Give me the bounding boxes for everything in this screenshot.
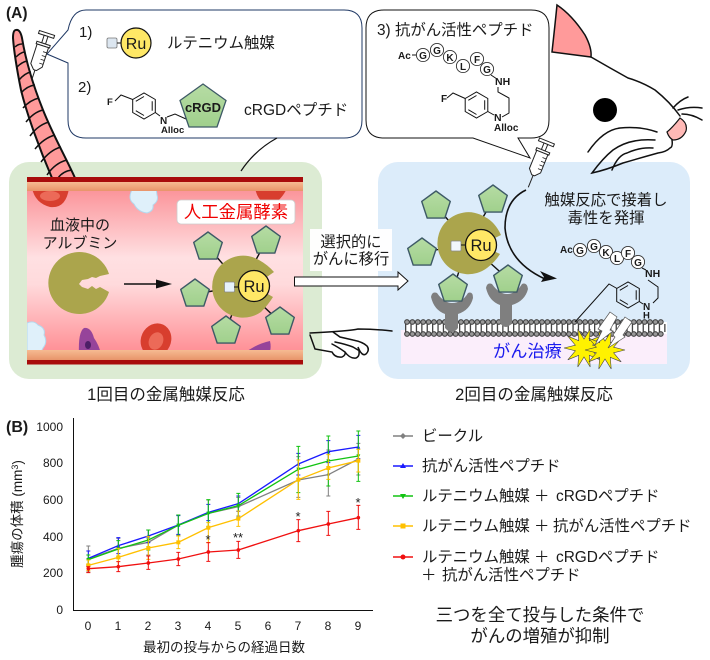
structure: peptide prodrug: Alloc — [494, 123, 519, 134]
icon: artificial metalloenzyme — [181, 226, 294, 343]
structure: attached peptide: K — [602, 248, 610, 259]
series: Ru + anticancer peptide — [86, 449, 360, 571]
legend: Ru + peptide: ルテニウム触媒 — [422, 517, 530, 535]
structure: cRGD conjugate: N — [160, 116, 167, 127]
legend: vehicle — [393, 427, 483, 445]
structure: attached peptide: G — [590, 242, 598, 253]
structure: peptide prodrug: L — [460, 62, 466, 73]
series: anticancer peptide — [86, 435, 360, 566]
x axis ticks: 4 — [205, 619, 212, 633]
label: cancer therapy: がん治療 — [493, 341, 562, 361]
data series — [86, 431, 360, 573]
arrow: albumin to enzyme — [124, 280, 172, 288]
legend: all three: ＋ — [421, 567, 436, 584]
icon: syringe 1 — [24, 31, 55, 83]
callout: catalysts 1 and 2 — [47, 10, 362, 138]
mouse ear — [552, 5, 591, 57]
y axis ticks — [36, 420, 63, 617]
legend: Ru + cRGD — [393, 487, 659, 505]
y axis ticks: 600 — [43, 493, 63, 507]
icon: enzyme bound to receptors: Ru — [470, 237, 492, 255]
structure: attached peptide: F — [625, 249, 631, 260]
structure: attached peptide: L — [614, 254, 620, 265]
legend: Ru + cRGD: cRGDペプチド — [556, 487, 659, 505]
legend: all three: ＋ — [534, 549, 549, 566]
legend: Ru + cRGD: ルテニウム触媒 — [422, 487, 530, 505]
significance marks: * — [205, 532, 211, 547]
structure: attached peptide: G — [634, 258, 642, 269]
item number 2: 2) — [78, 79, 91, 96]
cell membrane — [405, 322, 667, 334]
icon: Ru catalyst — [107, 28, 151, 58]
legend — [393, 427, 692, 584]
blood cells and white cells — [27, 188, 287, 362]
text: catalytic attachment: 毒性を発揮 — [568, 209, 644, 227]
legend: Ru + cRGD: ＋ — [534, 488, 549, 505]
y axis ticks: 0 — [56, 603, 63, 617]
icon: mouse — [552, 5, 702, 173]
mouse nose — [667, 118, 686, 140]
label: artificial metalloenzyme: 人工金属酵素 — [184, 202, 288, 222]
y axis ticks: 200 — [43, 566, 63, 580]
icon: enzyme bound to receptors — [408, 185, 522, 301]
series: vehicle — [86, 443, 360, 572]
structure: peptide prodrug: NH — [495, 76, 510, 88]
x axis ticks: 2 — [145, 619, 152, 633]
text: selective migration to cancer: がんに移行 — [313, 251, 389, 268]
mouse whiskers — [588, 97, 702, 170]
text: catalytic attachment: 触媒反応で接着し — [544, 191, 668, 209]
callout: peptide 3 — [366, 10, 549, 158]
x axis ticks — [85, 619, 362, 633]
structure: attached peptide: N — [643, 302, 650, 313]
connector line: callout to vessel — [241, 138, 277, 171]
text: selective migration to cancer: 選択的に — [320, 234, 382, 251]
structure: attached peptide: H — [643, 310, 650, 322]
label: anticancer peptide: 3) 抗がん活性ペプチド — [377, 21, 533, 39]
x axis ticks: 3 — [175, 619, 182, 633]
icon: mouse tail — [13, 30, 75, 178]
legend: vehicle: ビークル — [422, 427, 483, 445]
icon: receptor right — [486, 284, 528, 327]
legend: Ru + peptide — [393, 517, 692, 535]
structure: peptide prodrug: G — [419, 51, 427, 62]
item number 1: 1) — [79, 24, 92, 41]
y axis ticks: 800 — [43, 456, 63, 470]
structure: attached peptide: NH — [645, 268, 660, 280]
y axis title: 腫瘍の体積 (mm — [10, 470, 25, 568]
label: albumin in blood: 血液中の — [50, 217, 110, 234]
x axis ticks: 6 — [265, 619, 272, 633]
vessel top wall — [27, 182, 303, 191]
structure: peptide prodrug: G — [483, 65, 491, 76]
icon: receptor left — [431, 292, 473, 332]
icon: Ru catalyst: Ru — [126, 36, 146, 53]
label: cRGD peptide: cRGDペプチド — [244, 101, 348, 119]
legend: anticancer peptide: 抗がん活性ペプチド — [422, 457, 561, 475]
cancer cell interior — [401, 330, 667, 364]
structure: peptide prodrug: N — [494, 112, 502, 124]
significance marks — [205, 495, 361, 547]
caption: first reaction: 1回目の金属触媒反応 — [87, 385, 245, 404]
y axis ticks: 1000 — [36, 420, 63, 434]
panel: second metal catalysis background — [378, 162, 690, 379]
structure: peptide prodrug: K — [446, 53, 454, 64]
icon: artificial metalloenzyme: Ru — [243, 278, 265, 296]
arrow: peptide to cancer cell — [505, 190, 557, 282]
x axis title: 最初の投与からの経過日数 — [143, 640, 305, 655]
legend: all three: ルテニウム触媒 — [422, 548, 530, 566]
blood vessel — [27, 177, 303, 364]
icon: syringe 2 — [521, 138, 554, 190]
legend: all three: 抗がん活性ペプチド — [442, 566, 581, 584]
x axis ticks: 9 — [355, 619, 362, 633]
x axis ticks: 7 — [295, 619, 302, 633]
block arrow: selective migration — [294, 272, 408, 290]
series: all three — [86, 505, 360, 573]
legend: Ru + peptide: 抗がん活性ペプチド — [553, 517, 692, 535]
significance marks: ** — [233, 530, 243, 545]
legend: all three — [393, 548, 659, 584]
structure: cRGD conjugate — [107, 84, 226, 136]
structure: attached peptide — [560, 239, 660, 322]
icon: albumin — [48, 252, 109, 314]
panel label B: (B) — [6, 419, 28, 436]
structure: cRGD conjugate: cRGD — [185, 100, 221, 115]
line chart: tumor volume — [10, 418, 373, 655]
structure: peptide prodrug: F — [441, 94, 447, 105]
structure: peptide prodrug: F — [474, 55, 480, 66]
x axis ticks: 0 — [85, 619, 92, 633]
mouse jaw and front limb — [592, 140, 672, 173]
vessel bottom wall — [27, 350, 303, 360]
x axis ticks: 8 — [325, 619, 332, 633]
x axis ticks: 5 — [235, 619, 242, 633]
series: Ru + cRGD — [86, 431, 360, 564]
caption: second reaction: 2回目の金属触媒反応 — [455, 385, 613, 404]
conclusion text: 三つを全て投与した条件で — [436, 605, 644, 625]
panel label A: (A) — [6, 5, 28, 22]
panel: first metal catalysis background — [9, 162, 322, 379]
mouse hind paw — [310, 329, 392, 358]
y axis ticks: 400 — [43, 530, 63, 544]
conclusion text: がんの増殖が抑制 — [470, 626, 610, 646]
structure: peptide prodrug: Ac — [398, 51, 411, 62]
text: selective migration to cancer — [310, 229, 392, 271]
y axis title: 3 — [10, 465, 20, 470]
chart axes — [74, 418, 373, 610]
mouse eye — [593, 98, 617, 122]
structure: cRGD conjugate: Alloc — [161, 125, 184, 136]
significance marks: * — [295, 509, 301, 524]
label: ruthenium catalyst: ルテニウム触媒 — [167, 34, 275, 52]
structure: peptide prodrug — [398, 43, 519, 134]
y axis title: ) — [10, 460, 25, 465]
x axis ticks: 1 — [115, 619, 122, 633]
structure: cRGD conjugate: F — [107, 97, 113, 108]
label: albumin in blood: アルブミン — [43, 234, 117, 252]
mouse head outline — [591, 57, 680, 116]
structure: peptide prodrug: G — [433, 46, 441, 57]
icon: damage burst — [564, 312, 632, 369]
legend: all three: cRGDペプチド — [556, 548, 659, 566]
significance marks: * — [355, 495, 361, 510]
structure: attached peptide: G — [576, 246, 584, 257]
legend: Ru + peptide: ＋ — [534, 518, 549, 535]
structure: attached peptide: Ac — [560, 245, 573, 256]
